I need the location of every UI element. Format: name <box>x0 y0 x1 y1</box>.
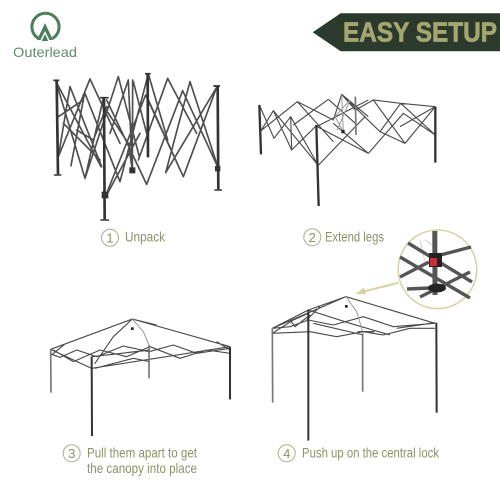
caption: step 1: Unpack <box>125 228 166 244</box>
frame: step 1 folded frame <box>53 74 221 220</box>
icon: ring with tent <box>32 13 59 41</box>
caption: step 3: the canopy into place <box>87 460 197 476</box>
caption: step 3: Pull them apart to get <box>87 444 197 460</box>
arrow: from detail to central lock <box>356 283 398 294</box>
brand name: Outerlead <box>13 44 77 60</box>
caption: step 1: 1 <box>106 230 114 245</box>
caption: step 4: 4 <box>283 446 290 461</box>
banner: easy setup <box>313 13 500 51</box>
caption: step 2: 2 <box>309 230 316 245</box>
caption: step 2: Extend legs <box>325 228 384 244</box>
caption: step 4 <box>278 444 440 462</box>
caption: step 1 <box>102 228 166 246</box>
frame: step 4 central lock pushed up <box>272 297 437 441</box>
caption: step 4: Push up on the central lock <box>302 444 440 460</box>
caption: step 3 <box>63 444 197 476</box>
caption: step 3: 3 <box>68 446 75 461</box>
caption: step 2 <box>304 228 384 246</box>
inset: central lock detail <box>398 230 477 309</box>
frame: step 2 legs extended <box>259 94 435 206</box>
frame: step 3 canopy pulled apart <box>51 319 230 436</box>
logo: Outerlead <box>13 13 77 60</box>
